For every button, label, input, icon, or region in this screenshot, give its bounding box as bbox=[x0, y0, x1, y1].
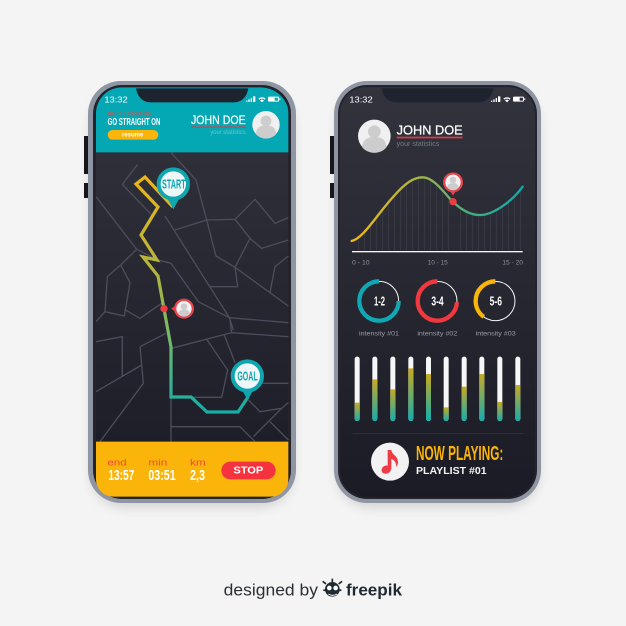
now playing bbox=[353, 433, 523, 481]
ring 3: intensity #03 bbox=[476, 330, 516, 337]
status icons bbox=[246, 96, 280, 102]
header: directions and profile: JOHN DOE bbox=[191, 113, 246, 127]
ring 2: intensity #02 bbox=[417, 330, 458, 337]
status bar and profile bbox=[349, 88, 525, 153]
now playing: PLAYLIST #01 bbox=[416, 466, 487, 477]
icon: freepik mascot bbox=[323, 579, 342, 597]
now playing: NOW PLAYING: bbox=[416, 443, 503, 465]
phone body: right bbox=[330, 81, 541, 508]
stop button: STOP bbox=[233, 466, 264, 477]
line chart: 10 - 15 bbox=[428, 260, 448, 267]
position pin bbox=[160, 299, 194, 319]
ring 1: 1-2 bbox=[374, 295, 385, 309]
start pin bbox=[157, 167, 190, 209]
bottom stats bar bbox=[96, 442, 288, 497]
phone body: left bbox=[84, 81, 296, 508]
line chart bbox=[352, 172, 524, 267]
phone: statistics bbox=[330, 81, 541, 508]
status icons bbox=[491, 96, 525, 102]
ring 2 bbox=[417, 281, 458, 337]
status bar and profile: 13:32 bbox=[349, 95, 373, 105]
ring 1 bbox=[359, 281, 399, 337]
chart marker pin bbox=[443, 172, 463, 205]
goal pin bbox=[231, 359, 264, 400]
bottom stats bar: min bbox=[148, 458, 167, 468]
bottom stats bar: 2,3 bbox=[190, 468, 205, 484]
avatar bbox=[358, 120, 391, 153]
stop button bbox=[221, 462, 276, 479]
header: directions and profile: 13:32 bbox=[104, 95, 128, 105]
phone: navigation map bbox=[84, 81, 296, 508]
ring 1: intensity #01 bbox=[359, 330, 399, 337]
line chart: 15 - 20 bbox=[502, 260, 524, 267]
ring 3: 5-6 bbox=[490, 295, 502, 309]
header: directions and profile: your statistics bbox=[210, 130, 246, 136]
footer credit: freepik bbox=[346, 581, 403, 600]
route line bbox=[136, 177, 248, 412]
status bar and profile: JOHN DOE bbox=[397, 123, 463, 138]
avatar bbox=[252, 111, 280, 139]
equalizer bars bbox=[355, 357, 520, 421]
icon: music note bbox=[371, 443, 409, 481]
ring 3 bbox=[476, 281, 516, 337]
goal pin: GOAL bbox=[237, 370, 258, 384]
resume button bbox=[108, 130, 158, 140]
footer credit bbox=[224, 579, 403, 600]
line chart: 0 - 10 bbox=[352, 260, 370, 267]
bottom stats bar: 13:57 bbox=[108, 468, 134, 484]
intensity rings bbox=[359, 281, 516, 337]
header: directions and profile bbox=[96, 87, 288, 152]
resume button: resume bbox=[122, 133, 144, 139]
header: directions and profile: GO STRAIGHT ON bbox=[108, 117, 160, 128]
header: directions and profile: NEXT DIRECTION bbox=[108, 111, 152, 116]
ring 2: 3-4 bbox=[431, 295, 444, 309]
map street network bbox=[96, 153, 288, 442]
start pin: START bbox=[162, 178, 186, 192]
footer credit: designed by bbox=[224, 582, 319, 600]
bottom stats bar: 03:51 bbox=[148, 468, 176, 484]
status bar and profile: your statistics bbox=[397, 141, 440, 148]
bottom stats bar: end bbox=[107, 458, 127, 468]
bottom stats bar: km bbox=[190, 458, 206, 468]
